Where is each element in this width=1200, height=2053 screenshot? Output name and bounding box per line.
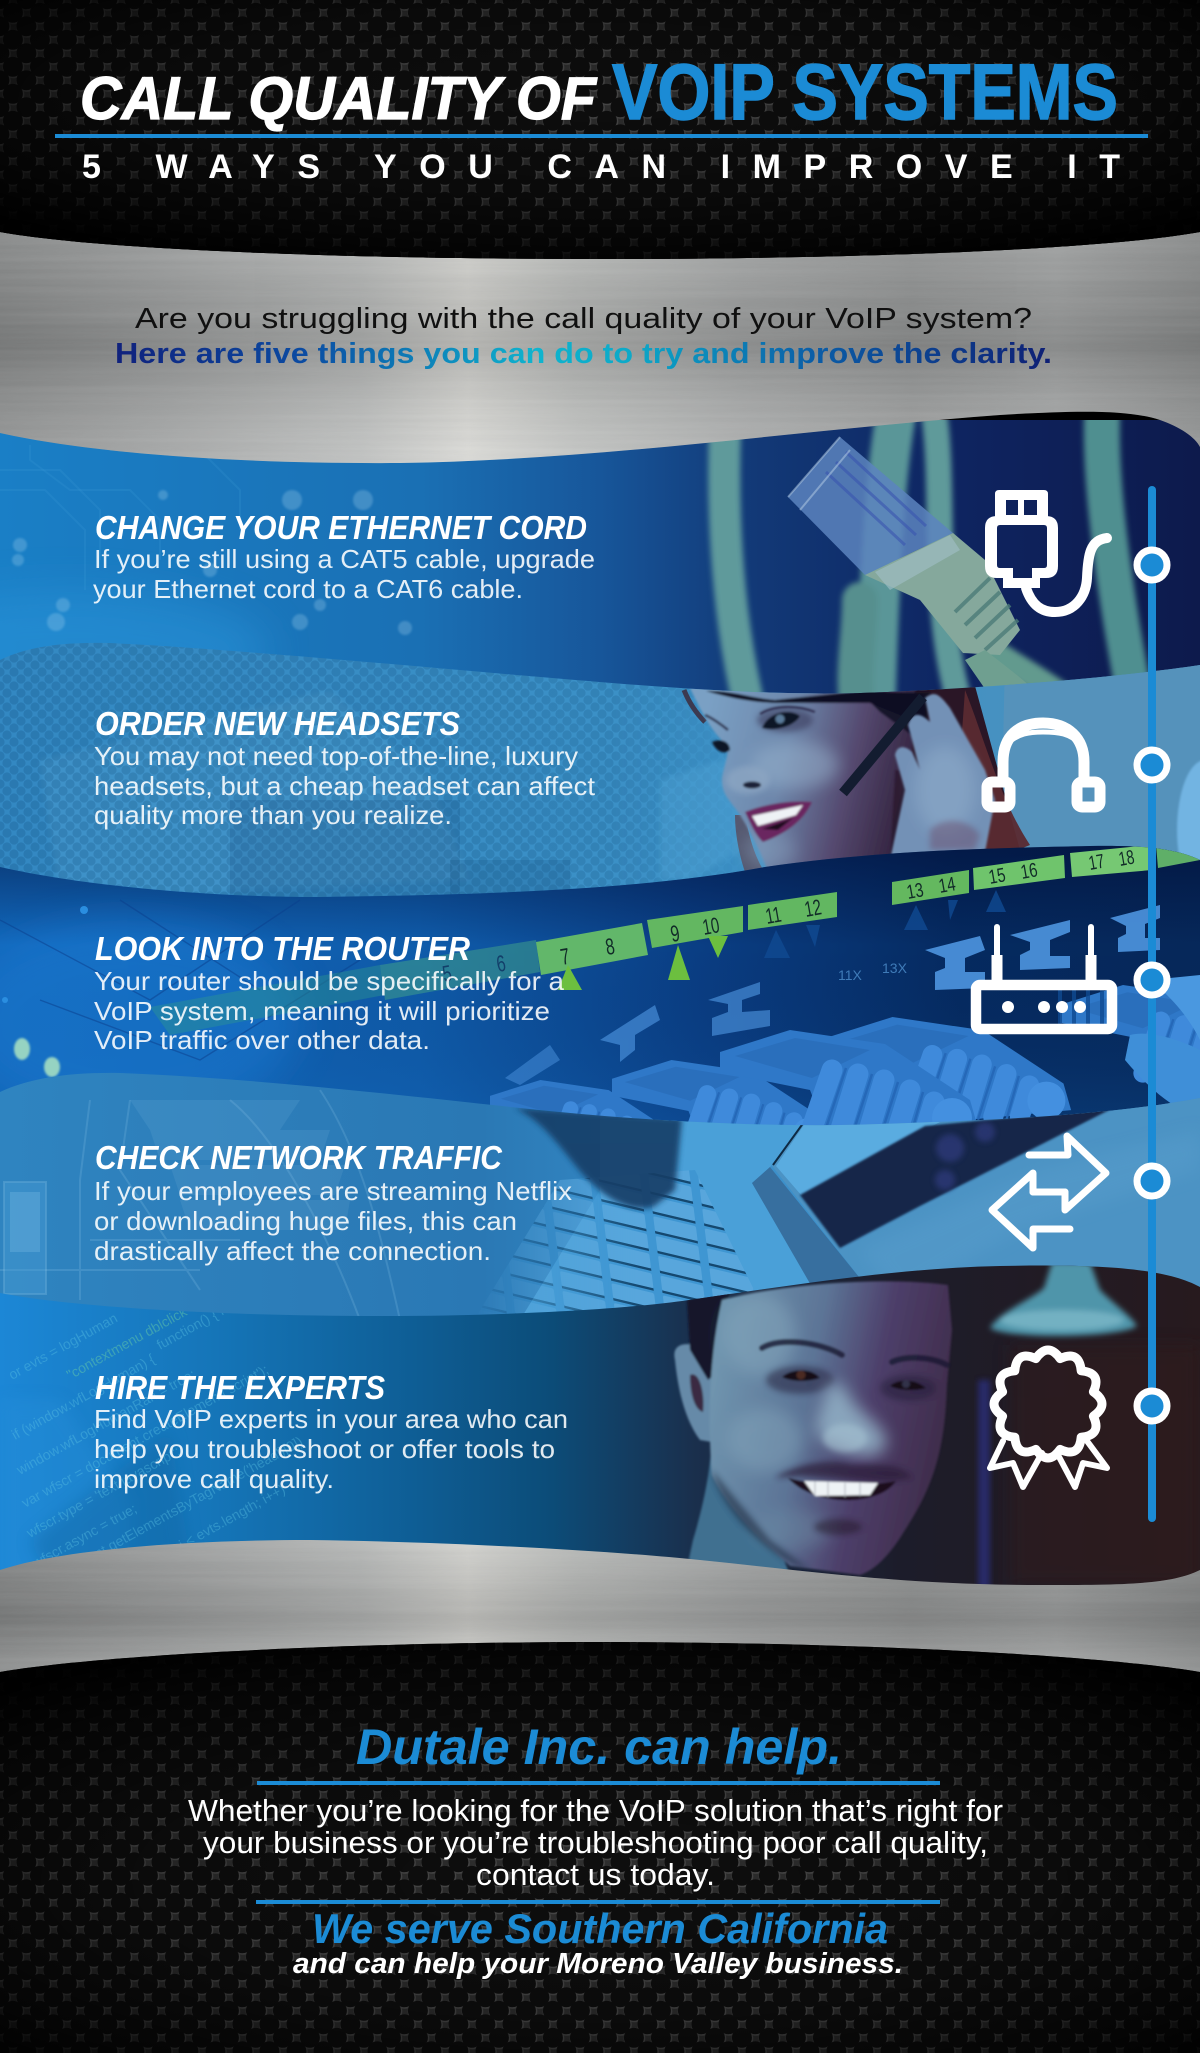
green port labels: 17: [1087, 849, 1106, 875]
icon: headphones: [987, 723, 1100, 807]
panel: look into the router photo: [0, 846, 1200, 1126]
text block: change your ethernet cord: [93, 509, 595, 604]
laptop keyboard: [490, 1170, 754, 1314]
title: CALL QUALITY OF: [80, 65, 597, 132]
footer closing text: [293, 1905, 903, 1980]
code lines: function() { return; }: [154, 1280, 267, 1353]
text block: hire the experts: HIRE THE EXPERTS: [95, 1369, 385, 1406]
text block: look into the router: VoIP traffic over other data.: [94, 1025, 430, 1055]
panel: check network traffic photo: [0, 1070, 1200, 1330]
green port labels: 13: [905, 878, 925, 903]
panel: hire the experts photo: [0, 1260, 1200, 1600]
icon: router: [976, 927, 1112, 1029]
text block: look into the router: LOOK INTO THE ROUTER: [95, 930, 470, 967]
laptop screen: [752, 1103, 1200, 1283]
text block: hire the experts: help you troubleshoot or offer tools to: [94, 1434, 555, 1464]
dark perforated header background: [0, 0, 1200, 259]
green port labels: 10: [701, 913, 721, 940]
woman's face: [690, 688, 930, 880]
code lines: for (var i = 0; i < evts.length; i++): [104, 1481, 288, 1593]
ethernet cable boots: [490, 975, 1200, 1126]
panel: look into the router photo: 13X: [882, 960, 908, 976]
laptop palm rest: [520, 1120, 815, 1320]
panel: look into the router photo: 11X: [838, 967, 863, 983]
headset microphone: [843, 697, 923, 793]
text block: change your ethernet cord: CHANGE YOUR ETHERNET CORD: [95, 509, 587, 546]
subtitle: 5 WAYS YOU CAN IMPROVE IT: [82, 148, 1120, 186]
footer heading: Dutale Inc. can help.: [356, 1719, 842, 1775]
text block: look into the router: [94, 930, 565, 1055]
code lines: wfscr.type = 'text/javascript';: [23, 1443, 183, 1541]
green port labels: 14: [937, 872, 957, 897]
text block: hire the experts: [94, 1369, 568, 1494]
green port labels: 5: [441, 961, 454, 988]
code lines: if (window.wfLogHuman) {: [9, 1350, 158, 1443]
title: [80, 47, 1118, 136]
text block: look into the router: VoIP system, meaning it will prioritize: [94, 996, 550, 1026]
silver band: bottom: [0, 1530, 1200, 1700]
footer body text: contact us today.: [476, 1857, 715, 1892]
woman's hand: [890, 694, 995, 860]
code lines: or evts = logHuman: [6, 1310, 120, 1383]
text block: order new headsets: You may not need top-of-the-line, luxury: [94, 741, 578, 771]
footer closing text: We serve Southern California: [312, 1905, 888, 1952]
text block: order new headsets: quality more than you realize.: [94, 800, 452, 830]
text block: check network traffic: or downloading huge files, this can: [94, 1206, 517, 1236]
text block: check network traffic: If your employees are streaming Netflix: [94, 1176, 572, 1206]
background lamp: [990, 1262, 1137, 1336]
code lines: wfscr.async = true;: [29, 1500, 139, 1571]
network port connectors: [505, 905, 1160, 1085]
text block: change your ethernet cord: If you’re still using a CAT5 cable, upgrade: [94, 544, 595, 574]
woman's hair: [684, 686, 1030, 880]
text block: check network traffic: [94, 1139, 572, 1266]
text block: order new headsets: headsets, but a cheap headset can affect: [94, 771, 596, 801]
timeline: [1137, 486, 1167, 1522]
chip outline: [4, 1182, 46, 1294]
green port labels: 8: [604, 934, 617, 961]
footer body text: your business or you’re troubleshooting poor call quality,: [203, 1825, 988, 1860]
text block: order new headsets: ORDER NEW HEADSETS: [95, 705, 460, 742]
text block: hire the experts: Find VoIP experts in your area who can: [94, 1404, 568, 1434]
footer body text: [188, 1793, 1003, 1892]
icon: award ribbon: [990, 1350, 1107, 1487]
green port labels: 9: [669, 921, 682, 948]
footer body text: Whether you’re looking for the VoIP solution that’s right for: [188, 1793, 1003, 1828]
silver band: top: [0, 225, 1200, 470]
footer rule: [256, 1900, 940, 1904]
title: VOIP SYSTEMS: [612, 47, 1118, 136]
man's face: [666, 1281, 952, 1600]
footer rule: [257, 1781, 940, 1785]
text block: look into the router: Your router should be specifically for a: [94, 966, 565, 996]
dark hand over keyboard: [515, 1108, 682, 1209]
intro text: Are you struggling with the call quality of your VoIP system?: [135, 303, 1032, 335]
text block: check network traffic: drastically affect the connection.: [94, 1236, 491, 1266]
text block: change your ethernet cord: your Ethernet cord to a CAT6 cable.: [93, 574, 523, 604]
green port labels: 16: [1019, 858, 1039, 883]
footer closing text: and can help your Moreno Valley business.: [293, 1948, 903, 1980]
intro text: Here are five things you can do to try and improve the clarity.: [115, 338, 1052, 370]
panel: order new headsets photo: [0, 640, 1200, 900]
text block: hire the experts: improve call quality.: [94, 1464, 334, 1494]
green port labels: 7: [559, 944, 572, 971]
panel: change your ethernet cord photo: [0, 420, 1200, 694]
code lines: "contextmenu dblclick: [64, 1303, 190, 1383]
green port labels: [150, 845, 1200, 1035]
dark perforated footer background: [0, 1642, 1200, 2053]
icon: two-way arrows: [992, 1136, 1106, 1248]
text block: check network traffic: CHECK NETWORK TRAFFIC: [95, 1139, 503, 1176]
code lines: window.wfLogHumanRan = true;: [13, 1366, 198, 1478]
green port labels: 6: [495, 951, 508, 978]
code lines: (document.getElementsByTagName('head')[0]): [44, 1433, 305, 1588]
green port labels: 18: [1117, 845, 1136, 871]
code lines: var wfscr = document.createElement('script');: [19, 1361, 271, 1511]
code lines: [10, 1311, 302, 1562]
icon: usb cable: [985, 490, 1107, 612]
green port labels: 15: [987, 863, 1007, 888]
text block: order new headsets: [94, 705, 596, 830]
ethernet plug: [787, 436, 1026, 687]
green port labels: 12: [803, 895, 823, 922]
title rule: [55, 134, 1148, 138]
green port labels: 11: [764, 902, 783, 929]
intro text: [115, 303, 1052, 370]
